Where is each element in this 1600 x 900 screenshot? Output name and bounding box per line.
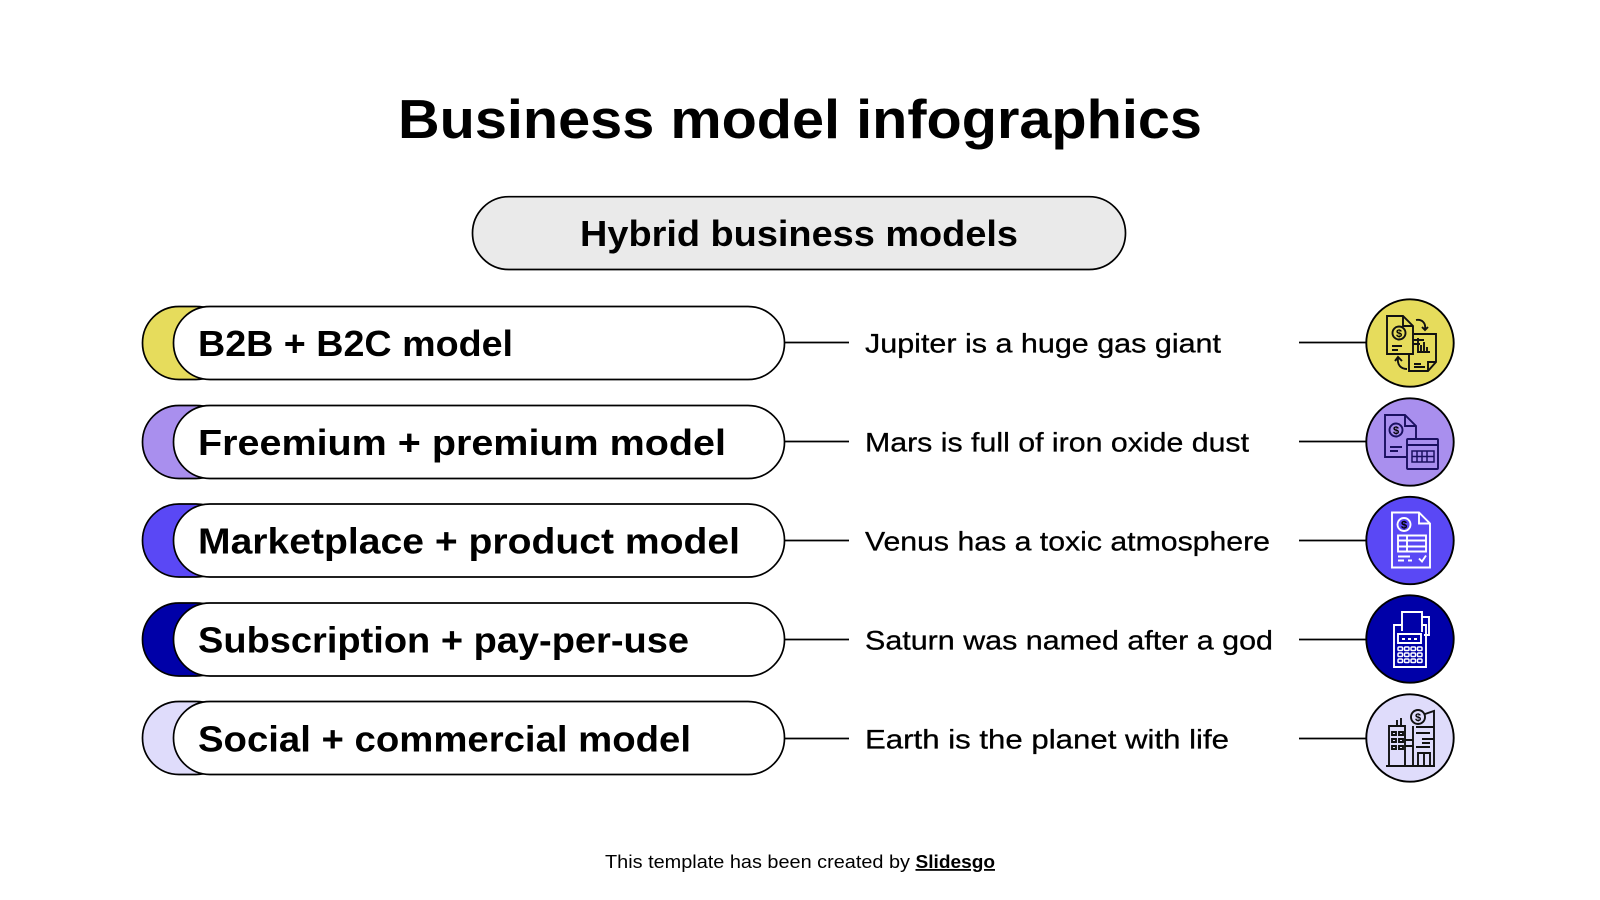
row 2: Freemium + premium model: Mars is full of iron oxide dust — [865, 428, 1250, 458]
icon: invoice: $ — [1401, 520, 1407, 532]
row 3: Marketplace + product model: Marketplace + product model — [198, 520, 740, 562]
row 1: B2B + B2C model — [142, 306, 1366, 380]
icon: document with calendar — [1366, 398, 1454, 486]
icon: buildings: $ — [1415, 712, 1421, 724]
row 2: Freemium + premium model — [142, 406, 1366, 478]
footer credit: This template has been created by — [605, 852, 910, 872]
row 1: B2B + B2C model: B2B + B2C model — [198, 323, 513, 364]
row 5: Social + commercial model: Earth is the planet with life — [865, 724, 1229, 754]
footer credit: Slidesgo — [916, 852, 995, 872]
row 5: Social + commercial model — [142, 702, 1366, 774]
row 3: Marketplace + product model: Venus has a toxic atmosphere — [865, 526, 1270, 556]
icon: invoice — [1366, 497, 1454, 584]
icon: document with calendar: $ — [1393, 425, 1399, 437]
icon: calculator — [1366, 595, 1454, 683]
row 1: B2B + B2C model: Jupiter is a huge gas giant — [865, 328, 1222, 358]
header pill: Hybrid business models: Hybrid business models — [580, 213, 1018, 254]
row 2: Freemium + premium model: Freemium + premium model — [198, 422, 726, 463]
title: Business model infographics — [398, 88, 1202, 150]
icon: documents exchange: $ — [1396, 328, 1402, 340]
row 4: Subscription + pay-per-use — [142, 603, 1366, 676]
icon: buildings — [1366, 694, 1454, 782]
row 4: Subscription + pay-per-use: Subscription + pay-per-use — [198, 620, 689, 660]
row 5: Social + commercial model: Social + commercial model — [198, 718, 691, 760]
row 4: Subscription + pay-per-use: Saturn was named after a god — [865, 626, 1273, 656]
row 3: Marketplace + product model — [142, 504, 1366, 577]
header pill: Hybrid business models — [472, 197, 1126, 270]
icon: documents exchange — [1366, 299, 1454, 387]
